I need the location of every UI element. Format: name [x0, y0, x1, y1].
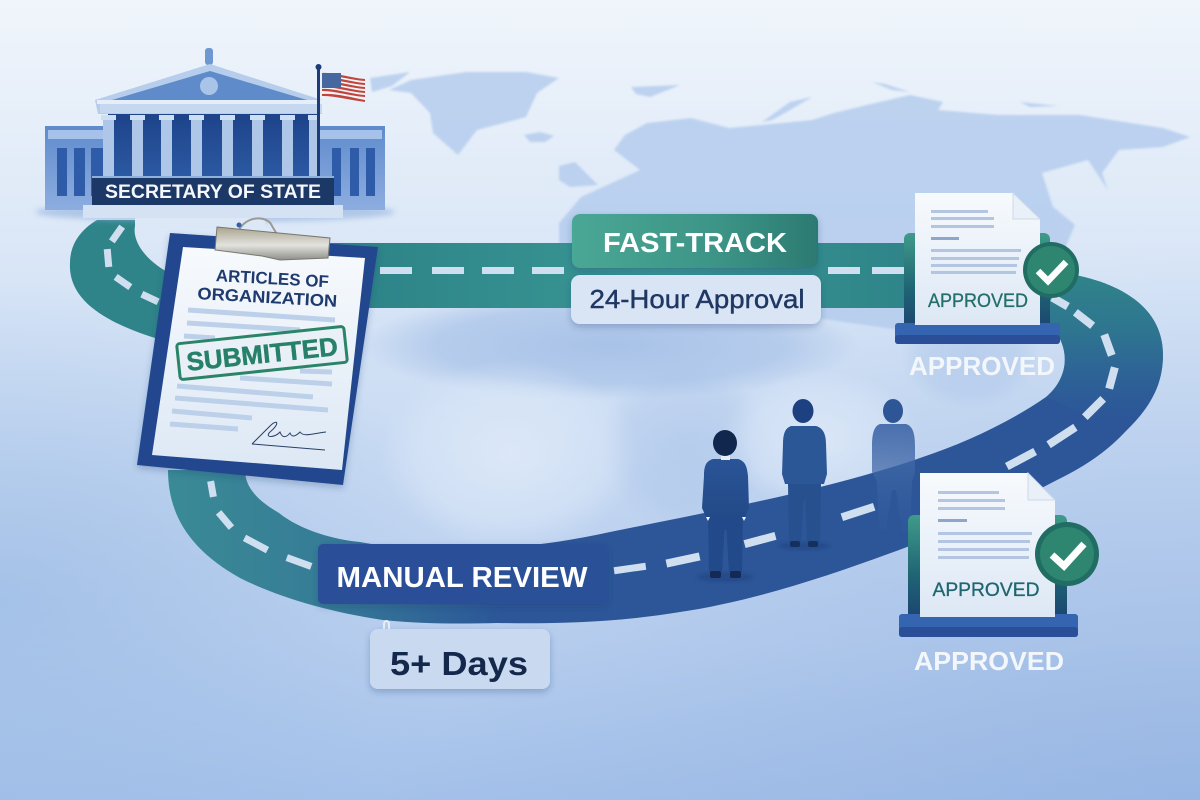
stamp: submitted: SUBMITTED: [185, 331, 339, 377]
continents: [370, 72, 1190, 330]
document 2: approved: [899, 473, 1099, 637]
document fold: [1013, 193, 1040, 219]
road: manual review and right curve: [168, 268, 1163, 624]
document lines: [938, 491, 1032, 559]
sign: secretary of state: [92, 176, 334, 205]
sign: secretary of state: SECRETARY OF STATE: [105, 182, 321, 203]
signature: [252, 422, 326, 450]
document 1: approved: [895, 193, 1079, 344]
road lane dashes: [104, 225, 1119, 574]
badge: 24-hour approval: 24-Hour Approval: [590, 284, 804, 314]
building base: [83, 205, 343, 226]
left wing: [45, 126, 105, 210]
badge: 24-hour approval: [571, 275, 821, 324]
document fold: [1028, 473, 1055, 500]
label: approved 1: APPROVED: [909, 351, 1055, 381]
clip: [215, 218, 330, 260]
badge: fast-track: FAST-TRACK: [603, 227, 787, 258]
document page: [915, 193, 1040, 325]
road: fast-track left curve: [70, 220, 175, 345]
document page: [920, 473, 1055, 617]
document stamp text: APPROVED: [932, 580, 1040, 601]
world map: [360, 72, 1190, 550]
document tray: [895, 233, 1060, 344]
central colonnade: [101, 113, 318, 179]
building: secretary of state: [35, 48, 395, 226]
heading: articles of organization: [197, 265, 339, 311]
clipboard board: [137, 233, 378, 485]
map cloud shading: [360, 290, 1040, 550]
document lines: [931, 210, 1021, 274]
label: approved 2: APPROVED: [914, 646, 1064, 676]
person 1: [697, 430, 753, 582]
heading: articles of organization: ARTICLES OF: [215, 266, 329, 291]
badge: manual review: MANUAL REVIEW: [336, 562, 588, 594]
heading: articles of organization: ORGANIZATION: [197, 284, 338, 311]
road: right curve teal blend: [1000, 268, 1163, 432]
clipboard: articles of organization: [137, 218, 378, 485]
pediment: [95, 48, 323, 114]
badge: fast-track: [572, 214, 818, 268]
building shadow: [35, 202, 395, 222]
badge: 5+ days: [370, 621, 550, 689]
document stamp text: APPROVED: [928, 291, 1028, 312]
right wing: [318, 126, 385, 210]
road: fast-track top: [330, 243, 1000, 308]
flag: [316, 64, 365, 178]
badge: 5+ days: 5+ Days: [390, 645, 528, 682]
check badge: [1035, 522, 1099, 586]
document tray: [899, 515, 1078, 637]
person 3: [872, 399, 915, 533]
paper: [152, 247, 365, 470]
badge: manual review: [318, 544, 608, 604]
person 2: [778, 399, 830, 550]
check badge: [1023, 242, 1079, 298]
text lines on paper: [170, 310, 335, 429]
people queue: [697, 399, 915, 582]
